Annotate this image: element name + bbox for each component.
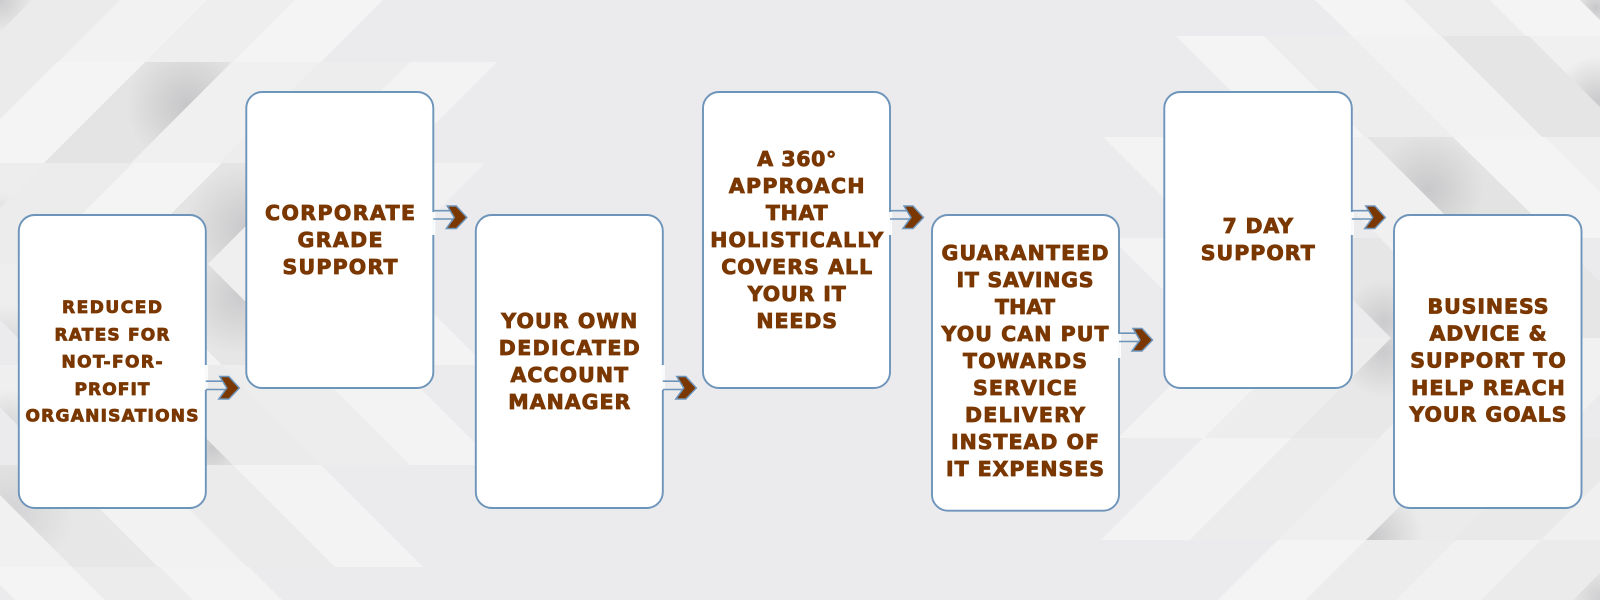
arrow: step 2 to 3 [431, 206, 467, 235]
arrow: step 5 to 6 [1117, 328, 1152, 358]
arrow: step 4 to 5 [888, 206, 924, 235]
panel: business advice and support: BUSINESS [1428, 294, 1548, 318]
panel: dedicated account manager [476, 215, 663, 508]
panel: business advice and support: SUPPORT TO [1410, 349, 1566, 373]
panel: guaranteed IT savings: THAT [995, 295, 1055, 319]
panel: guaranteed IT savings: INSTEAD OF [951, 430, 1099, 454]
panel: 7 day support: 7 DAY [1222, 214, 1294, 238]
arrow: step 6 to 7 [1350, 206, 1385, 235]
arrow: step 3 to 4 [661, 365, 696, 399]
panel: 360 degree approach: YOUR IT [747, 282, 846, 306]
panel: business advice and support [1394, 215, 1582, 508]
panel: guaranteed IT savings [932, 215, 1119, 511]
panel: 360 degree approach: NEEDS [756, 309, 837, 333]
right lower bands [1118, 338, 1304, 438]
panel: business advice and support: HELP REACH [1411, 376, 1565, 400]
panel: reduced rates: ORGANISATIONS [26, 406, 198, 426]
right upper bands [1315, 0, 1440, 36]
panel: 360 degree approach: HOLISTICALLY [710, 228, 884, 252]
panel: guaranteed IT savings: YOU CAN PUT [940, 322, 1109, 346]
panel: guaranteed IT savings: DELIVERY [965, 403, 1086, 427]
panel: corporate grade support [246, 92, 433, 388]
panel: dedicated account manager: DEDICATED [499, 336, 640, 360]
left lower bands [32, 264, 222, 365]
panel: 360 degree approach: COVERS ALL [721, 255, 872, 279]
panel: guaranteed IT savings: TOWARDS [963, 349, 1087, 373]
panel: guaranteed IT savings: IT SAVINGS [956, 268, 1094, 292]
panel: 7 day support [1164, 92, 1352, 388]
panel: guaranteed IT savings: SERVICE [973, 376, 1077, 400]
panel: guaranteed IT savings: IT EXPENSES [946, 457, 1104, 481]
panel: guaranteed IT savings: GUARANTEED [942, 241, 1108, 265]
panel: reduced rates: REDUCED [62, 298, 162, 318]
panel: 360 degree approach: THAT [766, 201, 828, 225]
panel: reduced rates: NOT-FOR- [62, 352, 162, 372]
panel: 360 degree approach [703, 92, 890, 388]
panel: corporate grade support: GRADE [298, 228, 382, 252]
panel: corporate grade support: SUPPORT [282, 255, 398, 279]
left upper bands [0, 0, 32, 62]
panel: business advice and support: YOUR GOALS [1408, 402, 1566, 426]
panel: reduced rates [19, 215, 206, 508]
panel: reduced rates: RATES FOR [54, 326, 170, 346]
panel: dedicated account manager: YOUR OWN [500, 309, 637, 333]
panel: corporate grade support: CORPORATE [265, 201, 415, 225]
arrow: step 1 to 2 [204, 365, 239, 399]
panel: business advice and support: ADVICE & [1430, 322, 1547, 346]
panel: dedicated account manager: ACCOUNT [510, 363, 628, 387]
panel: dedicated account manager: MANAGER [508, 390, 631, 414]
panel: 360 degree approach: A 360° [757, 147, 836, 171]
panel: 360 degree approach: APPROACH [729, 174, 865, 198]
panel: reduced rates: PROFIT [74, 380, 150, 400]
panel: 7 day support: SUPPORT [1201, 241, 1315, 265]
